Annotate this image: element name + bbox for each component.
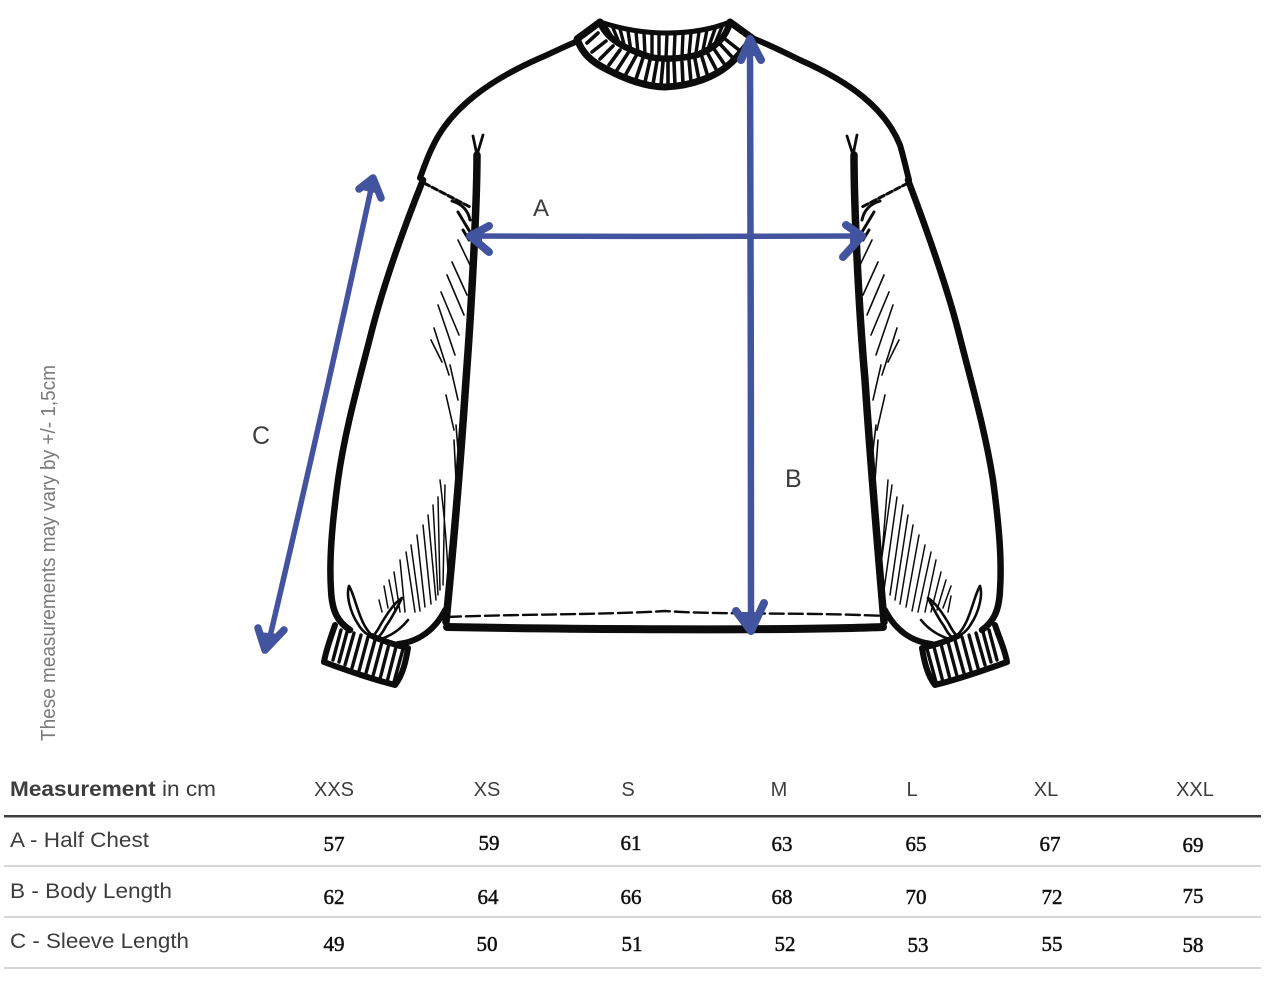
row: sleeve length: 50: [476, 932, 498, 956]
row: half chest: 57: [324, 832, 344, 856]
row: half chest: A - Half Chest: [10, 829, 149, 852]
row: half chest: [10, 829, 1204, 857]
row: body length: [10, 880, 1204, 909]
label B: B: [785, 465, 802, 493]
disclaimer note: These measurements may vary by +/- 1,5cm: [38, 365, 60, 741]
row: sleeve length: 53: [908, 933, 928, 957]
row: sleeve length: 49: [324, 932, 344, 956]
row: body length: 72: [1042, 885, 1062, 909]
row: half chest: 69: [1182, 833, 1204, 857]
row: half chest: 65: [906, 832, 926, 856]
row: body length: 70: [906, 885, 926, 909]
row: sleeve length: 58: [1182, 933, 1204, 957]
left sleeve: [324, 180, 470, 685]
row: half chest: 59: [478, 831, 500, 855]
collar: [577, 22, 752, 87]
row: sleeve length: 52: [774, 932, 796, 956]
label A: A: [533, 195, 549, 222]
right sleeve: [860, 180, 1007, 685]
arrow A: half chest: [466, 225, 866, 257]
table header: XXL: [1176, 779, 1214, 801]
arrow B: body length: [736, 34, 764, 635]
row: sleeve length: [10, 930, 1204, 957]
row: sleeve length: 51: [622, 932, 642, 956]
row: half chest: 67: [1040, 832, 1060, 856]
table header: XS: [474, 779, 500, 801]
row: half chest: 63: [772, 832, 792, 856]
row: body length: 64: [478, 885, 499, 909]
sweatshirt illustration: [324, 22, 1007, 685]
size table: [4, 778, 1261, 969]
table header: XL: [1034, 779, 1058, 801]
table header: Measurement in cm: [10, 778, 216, 801]
row: body length: 66: [620, 885, 642, 909]
row: sleeve length: C - Sleeve Length: [10, 930, 189, 953]
table header: [10, 778, 1214, 801]
row: body length: B - Body Length: [10, 880, 172, 903]
row: body length: 68: [772, 885, 792, 909]
table header: M: [771, 779, 787, 801]
row: body length: 75: [1182, 884, 1204, 908]
table header: XXS: [314, 779, 354, 801]
table header: S: [621, 779, 635, 801]
arrow C: sleeve length: [258, 174, 381, 654]
table header: L: [906, 779, 918, 801]
row: body length: 62: [324, 885, 344, 909]
row: half chest: 61: [620, 831, 642, 855]
row: sleeve length: 55: [1042, 932, 1062, 956]
label C: C: [252, 422, 270, 450]
body and shoulders outline: [420, 38, 909, 629]
